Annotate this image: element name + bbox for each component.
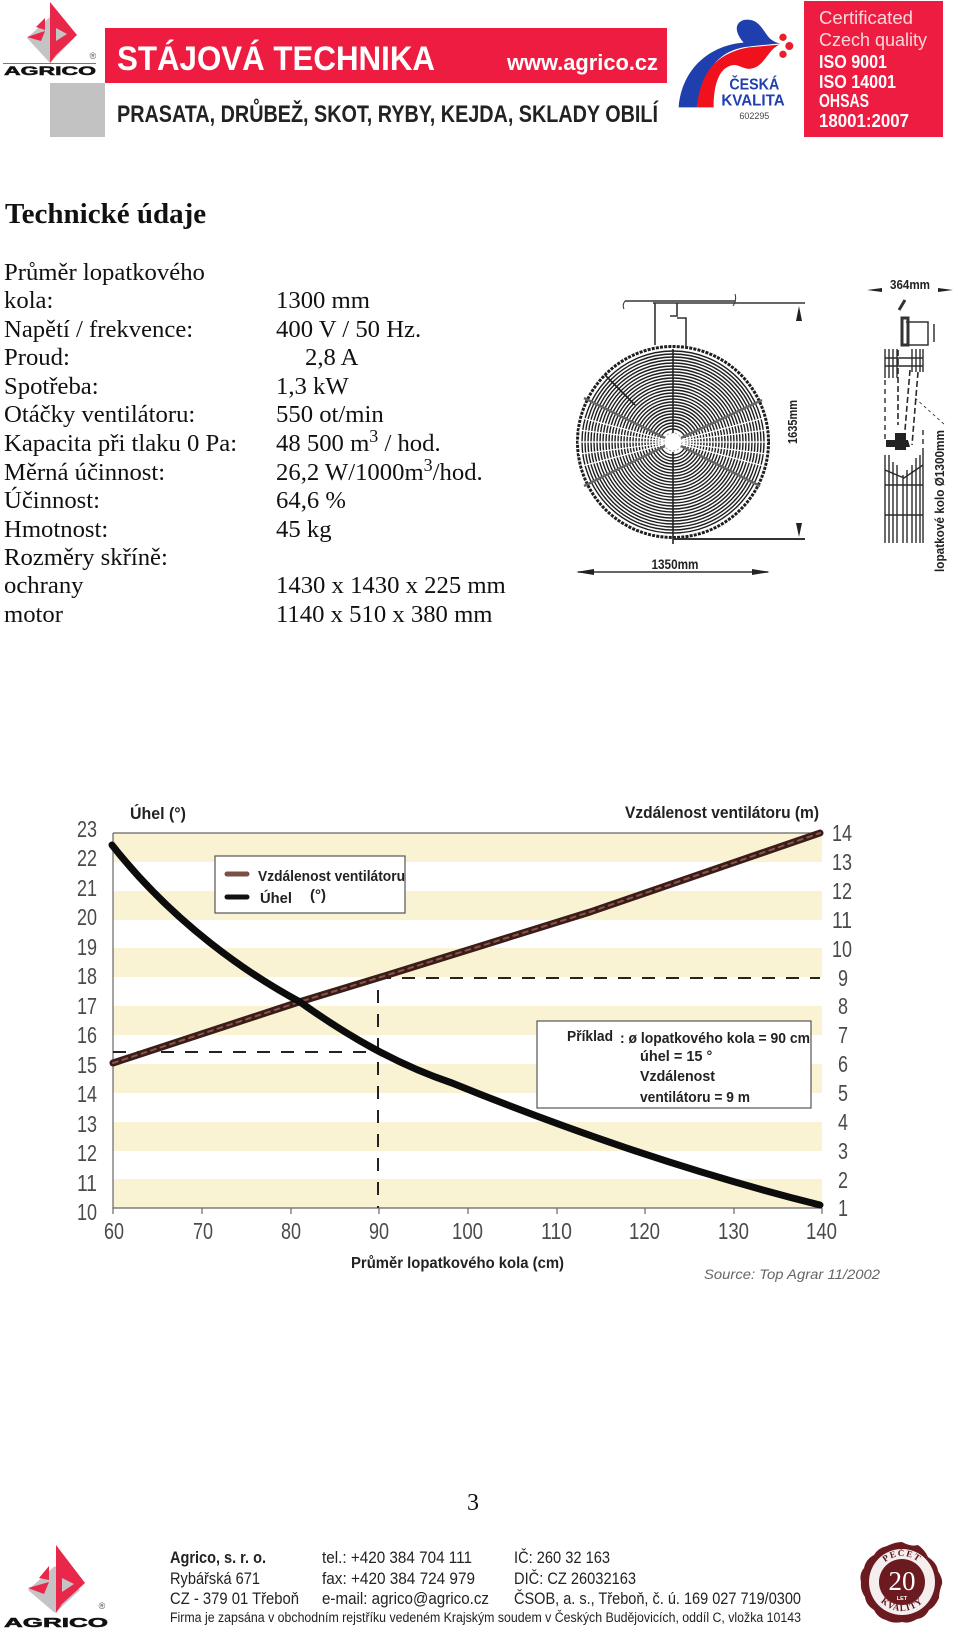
example callout: ventilátoru = 9 m <box>640 1090 750 1106</box>
right axis labels: 11 <box>832 907 852 933</box>
logo: Česká kvalita <box>679 20 793 121</box>
footer contacts: Rybářská 671 <box>170 1569 260 1588</box>
technical data table: /hod. <box>433 459 483 486</box>
gray block <box>50 83 105 137</box>
logo: Česká kvalita: 602295 <box>739 111 769 121</box>
heading: Technické údaje: Technické údaje <box>5 198 206 230</box>
seal: 20 <box>888 1566 916 1596</box>
header banner <box>3 1 943 137</box>
technical data table: 1300 mm <box>276 287 370 314</box>
left axis labels: 20 <box>77 904 97 930</box>
technical data table: motor <box>4 601 63 628</box>
technical data table <box>4 259 506 628</box>
right axis labels: 3 <box>838 1138 848 1164</box>
fan spokes <box>584 398 762 486</box>
left axis labels: 17 <box>77 993 97 1019</box>
red title bar: STÁJOVÁ TECHNIKA <box>117 40 435 78</box>
left axis labels: 22 <box>77 845 97 871</box>
left axis labels: 15 <box>77 1052 97 1078</box>
legend: Vzdálenost ventilátoru <box>258 868 405 885</box>
certification box <box>804 1 943 137</box>
bottom axis labels: 60 <box>104 1218 124 1244</box>
right axis labels: 7 <box>838 1022 848 1048</box>
footer contacts: ČSOB, a. s., Třeboň, č. ú. 169 027 719/0300 <box>514 1589 801 1608</box>
footer contacts: Firma je zapsána v obchodním rejstříku vedeném Krajským soudem v Českých Budějovicích, oddíl C, vložka 10143 <box>170 1610 801 1625</box>
right axis labels: 4 <box>838 1109 848 1135</box>
certification box: Certificated <box>819 7 913 28</box>
left axis labels: 10 <box>77 1199 97 1225</box>
technical data table: 64,6 % <box>276 487 346 514</box>
right axis labels: 9 <box>838 965 848 991</box>
left axis labels: 14 <box>77 1081 97 1107</box>
certification box: 18001:2007 <box>819 110 909 131</box>
left axis labels: 21 <box>77 875 97 901</box>
technical data table: 3 <box>424 455 433 475</box>
right axis labels: 14 <box>832 820 852 846</box>
footer contacts: fax: +420 384 724 979 <box>322 1569 475 1588</box>
side blades <box>885 349 945 543</box>
technical data table: Měrná účinnost: <box>4 459 165 486</box>
technical data table: 26,2 W/1000m <box>276 459 424 486</box>
legend: Úhel <box>260 889 292 907</box>
technical data table: 2,8 A <box>305 344 359 371</box>
fan side view drawing <box>867 277 953 572</box>
right axis labels: 13 <box>832 849 852 875</box>
technical data table: ochrany <box>4 572 84 599</box>
footer logo <box>4 1545 109 1630</box>
logo: Agrico: AGRICO <box>4 64 96 78</box>
bottom axis labels: 80 <box>281 1218 301 1244</box>
technical data table: 1,3 kW <box>276 373 349 400</box>
footer contacts: e-mail: agrico@agrico.cz <box>322 1589 489 1608</box>
seal: LET <box>897 1596 908 1602</box>
subtitle: PRASATA, DRŮBEŽ, SKOT, RYBY, KEJDA, SKLADY OBILÍ <box>117 98 659 128</box>
footer contacts: Agrico, s. r. o. <box>170 1548 266 1567</box>
width dimension <box>576 556 770 575</box>
bottom axis labels: 90 <box>369 1218 389 1244</box>
left axis title: Úhel (°) <box>130 804 186 823</box>
seal <box>860 1542 942 1623</box>
height dimension: 1635mm <box>785 400 800 444</box>
technical data table: 45 kg <box>276 516 332 543</box>
example callout: úhel = 15 ° <box>640 1049 712 1065</box>
fan side wedge breaks <box>578 418 768 466</box>
right axis labels: 10 <box>832 936 852 962</box>
right axis labels: 6 <box>838 1051 848 1077</box>
right axis labels: 12 <box>832 878 852 904</box>
footer contacts: tel.: +420 384 704 111 <box>322 1548 472 1567</box>
technical data table: 400 V / 50 Hz. <box>276 316 421 343</box>
footer logo: AGRICO <box>4 1616 109 1630</box>
fan front view drawing <box>576 294 805 575</box>
certification box: ISO 9001 <box>819 51 887 72</box>
legend: (°) <box>310 887 326 904</box>
footer contacts <box>170 1548 801 1625</box>
example callout: Příklad <box>567 1029 613 1045</box>
footer contacts: IČ: 260 32 163 <box>514 1548 610 1567</box>
left axis labels <box>77 816 97 1225</box>
plot stripes <box>113 833 822 1208</box>
example callout: : ø lopatkového kola = 90 cm <box>620 1031 810 1047</box>
distance line <box>113 833 820 1063</box>
technical data table: Spotřeba: <box>4 373 99 400</box>
technical data table: 1430 x 1430 x 225 mm <box>276 572 506 599</box>
side dimension label: lopatkové kolo Ø1300mm <box>932 430 947 572</box>
technical data table: Otáčky ventilátoru: <box>4 401 195 428</box>
angle curve <box>112 845 820 1205</box>
right axis title: Vzdálenost ventilátoru (m) <box>625 803 819 822</box>
bottom axis labels: 130 <box>718 1218 749 1244</box>
example callout <box>537 1021 811 1108</box>
chart <box>77 803 881 1282</box>
bottom axis labels: 140 <box>806 1218 837 1244</box>
width dimension: 1350mm <box>652 556 698 572</box>
left axis labels: 13 <box>77 1111 97 1137</box>
technical data table: kola: <box>4 287 53 314</box>
page number: 3 <box>467 1490 479 1516</box>
technical data table: Účinnost: <box>4 486 100 514</box>
footer logo: ® <box>99 1601 106 1611</box>
technical data table: Kapacita při tlaku 0 Pa: <box>4 430 237 457</box>
red title bar <box>105 28 667 83</box>
technical data table: 550 ot/min <box>276 401 384 428</box>
logo: Agrico: ® <box>90 51 97 61</box>
fan hub <box>664 433 682 451</box>
technical data table: / hod. <box>378 430 441 457</box>
technical data table: Rozměry skříně: <box>4 544 168 571</box>
logo: Česká kvalita: ČESKÁ <box>729 75 779 93</box>
right axis labels: 2 <box>838 1167 848 1193</box>
left axis labels: 16 <box>77 1022 97 1048</box>
left axis labels: 23 <box>77 816 97 842</box>
bottom axis title: Průměr lopatkového kola (cm) <box>351 1255 564 1272</box>
red title bar: www.agrico.cz <box>506 50 658 75</box>
footer contacts: DIČ: CZ 26032163 <box>514 1569 636 1588</box>
bottom axis labels <box>104 1218 837 1244</box>
logo: Česká kvalita: KVALITA <box>721 93 785 110</box>
technical data table: Průměr lopatkového <box>4 259 205 286</box>
example callout: Vzdálenost <box>640 1069 715 1085</box>
seal: PEČET <box>882 1548 921 1562</box>
logo: Agrico <box>3 2 97 78</box>
certification box: ISO 14001 <box>819 71 896 92</box>
dashed guides <box>113 978 820 1208</box>
left axis labels: 12 <box>77 1140 97 1166</box>
right axis labels <box>832 820 852 1221</box>
source note: Source: Top Agrar 11/2002 <box>704 1267 881 1282</box>
side motor <box>899 300 934 345</box>
side dimension <box>867 277 953 292</box>
side dimension: 364mm <box>890 277 930 292</box>
certification box: OHSAS <box>819 90 869 111</box>
technical data table: 1140 x 510 x 380 mm <box>276 601 492 628</box>
height dimension <box>673 306 805 539</box>
seal: KVALITY <box>880 1597 922 1612</box>
technical data table: Hmotnost: <box>4 516 108 543</box>
right axis labels: 5 <box>838 1080 848 1106</box>
right axis labels: 1 <box>838 1195 848 1221</box>
certification box: Czech quality <box>819 29 928 50</box>
right axis labels: 8 <box>838 993 848 1019</box>
bottom axis labels: 100 <box>452 1218 483 1244</box>
left axis labels: 11 <box>77 1170 97 1196</box>
legend <box>215 856 405 913</box>
technical data table: Proud: <box>4 344 70 371</box>
technical data table: 48 500 m <box>276 430 369 457</box>
plot frame <box>113 833 822 1214</box>
bottom axis labels: 120 <box>629 1218 660 1244</box>
left axis labels: 18 <box>77 963 97 989</box>
bottom axis labels: 70 <box>193 1218 213 1244</box>
technical data table: 3 <box>369 426 378 446</box>
footer contacts: CZ - 379 01 Třeboň <box>170 1589 299 1608</box>
side hub <box>886 433 910 450</box>
technical data table: Napětí / frekvence: <box>4 316 193 343</box>
bottom axis labels: 110 <box>541 1218 572 1244</box>
left axis labels: 19 <box>77 934 97 960</box>
footer <box>4 1542 942 1630</box>
fan guard rings <box>578 346 768 538</box>
fan mount <box>623 294 805 348</box>
